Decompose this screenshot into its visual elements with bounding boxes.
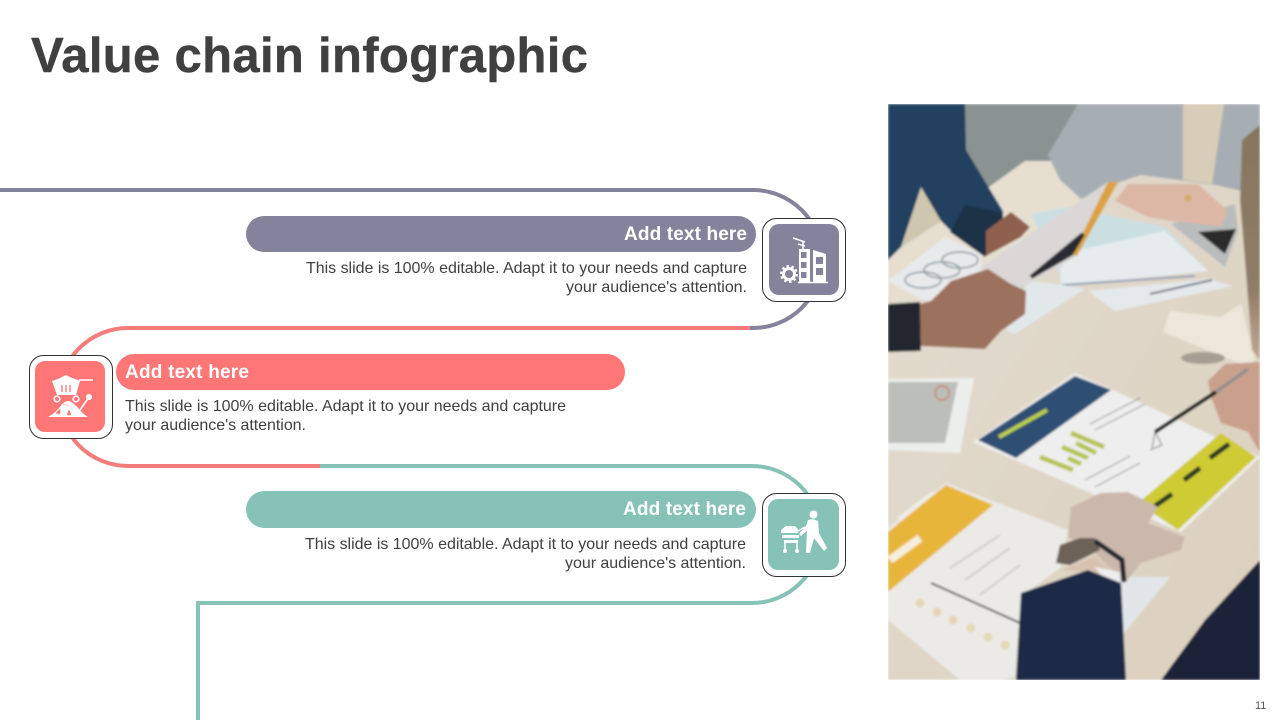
text block: step one: your audience's attention. — [566, 279, 747, 296]
heading pill: step two — [116, 354, 625, 390]
text block: step three: your audience's attention. — [565, 555, 746, 572]
photo: business team reviewing reports — [888, 104, 1260, 680]
heading pill: step one — [246, 216, 756, 252]
panel: step two — [30, 354, 625, 438]
connector: purple path — [0, 190, 822, 328]
title: Value chain infographic — [31, 29, 588, 83]
icon: shopper with trolley — [762, 494, 846, 576]
text block: step two: This slide is 100% editable. Adapt it to your needs and capture — [125, 398, 566, 415]
icon: mining cart and pile — [30, 356, 112, 438]
heading pill: step three — [246, 491, 756, 528]
text block: step two: your audience's attention. — [125, 417, 306, 434]
connector: teal path — [198, 466, 820, 720]
connector: red path — [59, 328, 750, 466]
icon: factory with gear — [762, 218, 846, 302]
panel: step one — [246, 216, 846, 302]
page number: 11 — [1255, 700, 1266, 712]
text block: step one: This slide is 100% editable. Adapt it to your needs and capture — [306, 260, 747, 277]
text block: step three: This slide is 100% editable. Adapt it to your needs and capture — [305, 536, 746, 553]
heading pill: step two: Add text here — [125, 362, 249, 383]
panel: step three — [246, 491, 846, 576]
heading pill: step one: Add text here — [624, 224, 747, 245]
heading pill: step three: Add text here — [623, 499, 746, 520]
